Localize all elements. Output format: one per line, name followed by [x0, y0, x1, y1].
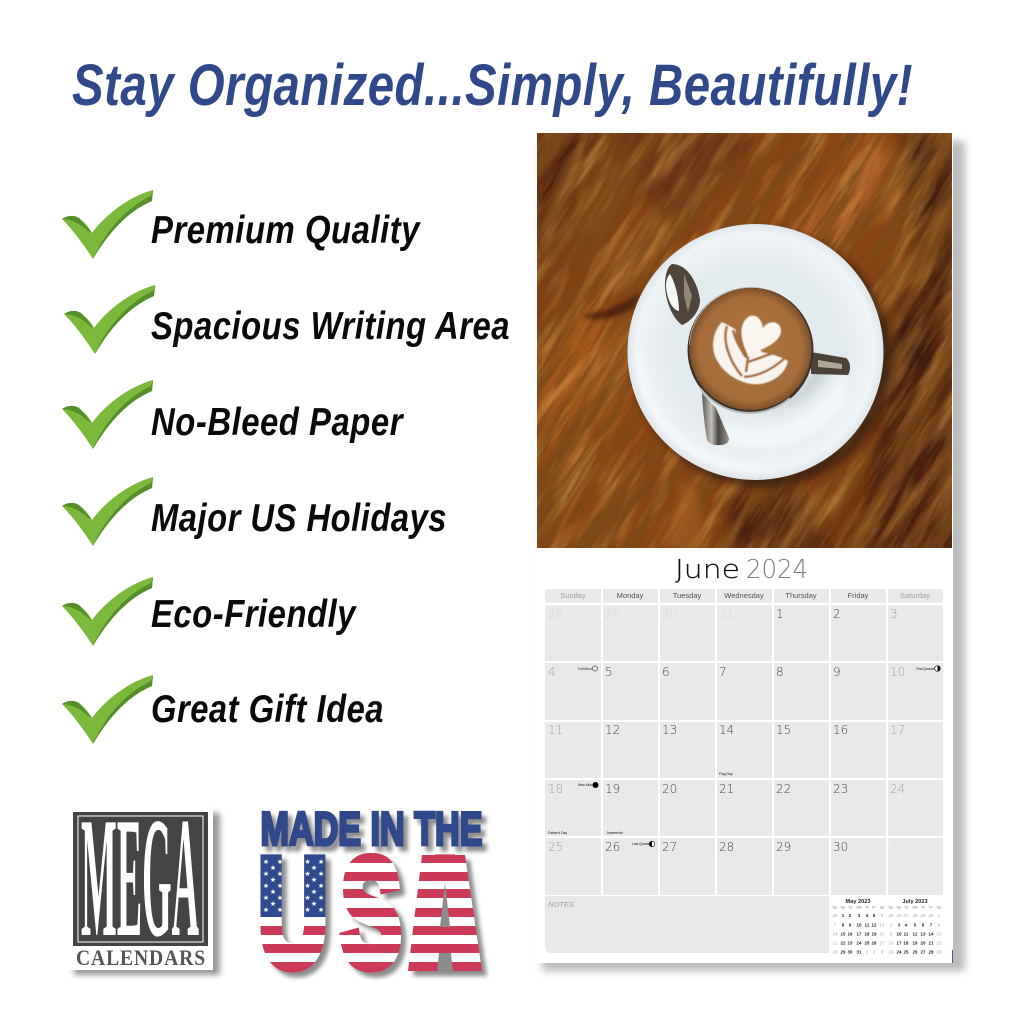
flag lettering: USA: ★: [263, 906, 269, 914]
flag lettering: USA: ★: [318, 858, 324, 866]
mini calendar: May 2023: 7: [834, 922, 837, 928]
mini calendar: May 2023: 5: [873, 913, 876, 918]
mini calendar: May 2023: 1: [842, 913, 845, 918]
day numbers: 22: [776, 782, 791, 796]
flag lettering: USA: ★: [298, 876, 304, 884]
flag lettering: USA: ★: [277, 882, 283, 890]
mini calendar: May 2023: Tu: [848, 906, 852, 910]
flag lettering: USA: ★: [263, 882, 269, 890]
spoon handle: [702, 393, 729, 445]
day numbers: 19: [605, 782, 620, 796]
mini calendar: May 2023: 17: [857, 932, 862, 936]
day numbers: 25: [548, 840, 563, 854]
mini calendar: May 2023: 11: [865, 922, 870, 928]
day numbers: 4: [548, 665, 556, 679]
mini calendar: May 2023: 14: [833, 932, 838, 936]
feature: No-Bleed Paper: No-Bleed Paper: [151, 401, 404, 444]
flag lettering: USA: ★: [263, 870, 269, 878]
flag lettering: USA: ★: [325, 900, 331, 908]
feature: Spacious Writing Area: Spacious Writing Area: [151, 305, 510, 348]
feature: Eco-Friendly: Eco-Friendly: [151, 593, 357, 636]
mini calendar: July 2023: 14: [929, 932, 934, 936]
weekday header row: Thursday: [785, 591, 817, 600]
mini calendar: May 2023: Mo: [841, 906, 845, 910]
feature: Premium Quality: Premium Quality: [151, 209, 421, 252]
flag lettering: USA: ★: [304, 894, 311, 902]
mini calendar: July 2023: 19: [913, 940, 918, 946]
day numbers: 23: [833, 782, 848, 796]
plate: [628, 224, 884, 480]
flag lettering: USA: ★: [291, 906, 297, 914]
feature: Great Gift Idea: Great Gift Idea: [151, 688, 384, 731]
mini calendar: July 2023: 10: [897, 932, 902, 936]
mini calendar: July 2023: 3: [898, 922, 901, 928]
flag lettering: USA: ★: [270, 900, 276, 908]
flag lettering: USA: ★: [291, 894, 297, 902]
flag lettering: USA: ★: [311, 864, 317, 872]
mini calendar: July 2023: 29: [937, 950, 942, 954]
flag lettering: USA: ★: [284, 888, 290, 896]
day numbers: 14: [719, 723, 734, 737]
day numbers: 31: [719, 607, 734, 621]
mini calendar: July 2023: 24: [897, 950, 902, 954]
day numbers: 13: [662, 723, 677, 737]
icon: check mark 1: [62, 190, 153, 259]
holiday and moon-phase notes: New Moon: [578, 783, 594, 787]
weekday header row: Sunday: [560, 591, 586, 600]
mini calendar: May 2023: 24: [857, 940, 862, 946]
day cells: [545, 605, 943, 895]
mini calendar: May 2023: 26: [872, 940, 877, 946]
mini calendar: May 2023: Th: [865, 906, 869, 910]
heading: Made in the: MADE IN THE: [265, 807, 487, 860]
mini calendar: July 2023: 20: [921, 940, 926, 946]
mini calendar: July 2023: 27: [904, 913, 909, 918]
flag lettering: USA: [260, 853, 490, 980]
mini calendar: July 2023: 27: [921, 950, 926, 954]
day numbers: [548, 607, 905, 854]
day numbers: 8: [776, 665, 784, 679]
day numbers: 30: [662, 607, 677, 621]
mini calendar: July 2023: 16: [889, 940, 894, 946]
flag lettering: USA: ★: [298, 900, 304, 908]
flag lettering: USA: ★: [298, 888, 304, 896]
flag lettering: USA: ★: [304, 858, 311, 866]
feature: Major US Holidays: Major US Holidays: [151, 497, 447, 540]
holiday and moon-phase notes: [548, 666, 940, 847]
mini calendar: July 2023: 28: [929, 950, 934, 954]
mini calendar: May 2023: 18: [865, 932, 870, 936]
mini calendar: July 2023: 30: [929, 913, 934, 918]
holiday and moon-phase notes: Last Quarter: [632, 842, 652, 846]
mini calendar: July 2023: Sa: [937, 906, 941, 910]
flag lettering: USA: ★: [325, 876, 331, 884]
day numbers: 29: [605, 607, 620, 621]
flag lettering: USA: ★: [311, 888, 317, 896]
mini calendar: May 2023: 29: [841, 950, 846, 954]
flag lettering: USA: S: [346, 833, 406, 1003]
mini calendar: May 2023: 30: [833, 913, 838, 918]
mini calendar: July 2023: 15: [937, 932, 942, 936]
mini calendar: May 2023: 1: [866, 950, 869, 954]
flag lettering: USA: ★: [332, 858, 338, 866]
calendar grid: [545, 589, 943, 895]
mini calendar: May 2023: 15: [841, 932, 846, 936]
flag lettering: USA: ★: [277, 906, 283, 914]
day numbers: 6: [662, 665, 670, 679]
mini calendar: July 2023: 22: [937, 940, 942, 946]
flag lettering: USA: ★: [270, 876, 276, 884]
day numbers: 1: [776, 607, 784, 621]
month heading: 2024: [746, 555, 808, 585]
calendar page: [537, 133, 970, 976]
mini calendar: May 2023: 21: [833, 940, 838, 946]
mini calendar: July 2023: [889, 899, 942, 954]
mini calendar: May 2023: 2: [873, 950, 876, 954]
mini calendar: May 2023: 23: [848, 940, 853, 946]
icon: check mark 3: [62, 380, 153, 449]
day numbers: 28: [548, 607, 563, 621]
mini calendar: May 2023: 3: [881, 950, 884, 954]
mini calendar: July 2023: 13: [921, 932, 926, 936]
mini calendar: July 2023: 21: [929, 940, 934, 946]
mini calendar: May 2023: 2: [849, 913, 852, 918]
day numbers: 5: [605, 665, 613, 679]
day numbers: 3: [890, 607, 898, 621]
holiday and moon-phase notes: Flag Day: [719, 772, 733, 776]
notes box: NOTES: [548, 900, 574, 909]
mini calendar: May 2023: Fr: [872, 906, 876, 910]
flag lettering: USA: ★: [277, 870, 283, 878]
month heading: June: [675, 555, 740, 585]
day numbers: 30: [833, 840, 848, 854]
mini calendar: May 2023: We: [856, 906, 862, 910]
flag lettering: USA: ★: [304, 870, 311, 878]
wood grain: [537, 133, 952, 548]
feature list: [62, 190, 510, 744]
mini calendar: July 2023: 8: [938, 922, 941, 928]
text: MEGA: [81, 783, 199, 973]
mini calendar: May 2023: 3: [858, 913, 861, 918]
flag lettering: USA: ★: [270, 888, 276, 896]
icon: check mark 2: [64, 285, 155, 354]
day numbers: 7: [719, 665, 727, 679]
flag lettering: USA: ★: [318, 870, 324, 878]
flag lettering: USA: ★: [318, 894, 324, 902]
flag lettering: USA: ★: [311, 876, 317, 884]
day numbers: 9: [833, 665, 841, 679]
day numbers: 17: [890, 723, 905, 737]
flag lettering: USA: U: [264, 833, 332, 1003]
icon: check mark 4: [62, 477, 153, 546]
mini calendar: July 2023: Mo: [897, 906, 901, 910]
day numbers: 29: [776, 840, 791, 854]
weekday header row: Wednesday: [724, 591, 764, 600]
weekday header row: Saturday: [900, 591, 930, 600]
flag lettering: USA: ★: [291, 870, 297, 878]
day numbers: 28: [719, 840, 734, 854]
day numbers: 10: [890, 665, 905, 679]
mini calendar: May 2023: 30: [848, 950, 853, 954]
flag lettering: USA: A: [418, 833, 482, 1003]
flag lettering: USA: ★: [284, 876, 290, 884]
mini calendar: May 2023: 9: [849, 922, 852, 928]
mini calendar: May 2023: 19: [872, 932, 877, 936]
mini calendar: May 2023: 8: [842, 922, 845, 928]
flag lettering: USA: ★: [304, 906, 311, 914]
flag lettering: USA: ★: [291, 858, 297, 866]
mini calendar: July 2023: 25: [889, 913, 894, 918]
weekday header row: [545, 589, 943, 603]
flag lettering: USA: ★: [311, 900, 317, 908]
wood tones: [537, 133, 952, 548]
mini calendar: May 2023: 10: [857, 922, 862, 928]
day numbers: 1: [890, 840, 898, 854]
mini calendar: July 2023: Fr: [929, 906, 933, 910]
mini calendar: July 2023: July 2023: [902, 899, 928, 905]
flag lettering: USA: ★: [277, 858, 283, 866]
icon: check mark 5: [62, 577, 153, 646]
plate shadow: [634, 230, 892, 488]
day numbers: 11: [548, 723, 563, 737]
mini calendar: May 2023: 16: [848, 932, 853, 936]
photo: latte on wooden table: [537, 133, 952, 548]
day numbers: 2: [833, 607, 841, 621]
mini calendar: May 2023: 28: [833, 950, 838, 954]
flag lettering: USA: ★: [263, 858, 269, 866]
logo: Mega Calendars: CALENDARS: [76, 945, 206, 970]
mini calendar: July 2023: 26: [897, 913, 902, 918]
flag lettering: USA: ★: [284, 864, 290, 872]
coffee crema: [690, 288, 812, 410]
flag lettering: USA: ★: [318, 906, 324, 914]
mini calendar: July 2023: 6: [922, 922, 925, 928]
day numbers: 18: [548, 782, 563, 796]
logo: Mega Calendars: [68, 783, 220, 975]
mini calendar: May 2023: 4: [866, 913, 869, 918]
holiday and moon-phase notes: Full Moon: [578, 667, 593, 671]
holiday and moon-phase notes: Father's Day: [548, 831, 567, 835]
mini calendar: May 2023: 31: [857, 950, 862, 954]
mini calendar: July 2023: 18: [904, 940, 909, 946]
flag lettering: USA: ★: [304, 882, 311, 890]
weekday header row: Monday: [617, 591, 644, 600]
day numbers: 16: [833, 723, 848, 737]
latte art: [713, 316, 788, 384]
cup handle: [811, 352, 850, 375]
day numbers: 21: [719, 782, 734, 796]
day numbers: 15: [776, 723, 791, 737]
mini calendar: May 2023: 27: [880, 940, 885, 946]
flag lettering: USA: ★: [318, 882, 324, 890]
flag lettering: USA: ★: [277, 894, 283, 902]
flag lettering: USA: ★: [332, 906, 338, 914]
mini calendar: July 2023: 26: [913, 950, 918, 954]
mini calendar: July 2023: 5: [914, 922, 917, 928]
mini calendar: July 2023: Su: [889, 906, 893, 910]
flag lettering: USA: ★: [263, 894, 269, 902]
flag lettering: USA: ★: [298, 864, 304, 872]
heading: Made in the: [260, 802, 487, 860]
mini calendar: July 2023: 25: [904, 950, 909, 954]
mini calendar: May 2023: 25: [865, 940, 870, 946]
flag lettering: USA: ★: [270, 864, 276, 872]
notes box: [545, 896, 829, 953]
heading: Made in the: MADE IN THE: [260, 802, 482, 855]
day numbers: 27: [662, 840, 677, 854]
logo: Made in the USA: [260, 810, 490, 980]
mini calendar: May 2023: 13: [880, 922, 885, 928]
mini calendar: May 2023: 6: [881, 913, 884, 918]
month heading: [675, 555, 808, 585]
mini calendar: July 2023: 7: [930, 922, 933, 928]
mini calendar: May 2023: 12: [872, 922, 877, 928]
flag lettering: USA: ★: [325, 888, 331, 896]
flag lettering: USA: ★: [284, 900, 290, 908]
mini calendar: July 2023: 11: [904, 932, 909, 936]
mini calendar: July 2023: 1: [938, 913, 941, 918]
mini calendar: May 2023: 22: [841, 940, 846, 946]
flag lettering: USA: ★: [332, 894, 338, 902]
mini calendar: May 2023: Sa: [880, 906, 884, 910]
icon: check mark 6: [62, 675, 153, 744]
mini calendar: May 2023: 20: [880, 932, 885, 936]
mini calendar: July 2023: 29: [921, 913, 926, 918]
mini calendar: July 2023: 2: [890, 922, 893, 928]
holiday and moon-phase notes: Juneteenth: [606, 831, 623, 835]
flag lettering: USA: ★: [291, 882, 297, 890]
mini calendar: May 2023: [833, 899, 885, 954]
cup rim: [688, 287, 814, 413]
day numbers: 12: [605, 723, 620, 737]
mini calendar: July 2023: Tu: [904, 906, 908, 910]
day numbers: 24: [890, 782, 905, 796]
day numbers: 20: [662, 782, 677, 796]
mini calendar: July 2023: We: [912, 906, 918, 910]
mini calendar: July 2023: 9: [890, 932, 893, 936]
holiday and moon-phase notes: First Quarter: [916, 667, 936, 671]
weekday header row: Friday: [848, 591, 869, 600]
mini calendar: July 2023: 23: [889, 950, 894, 954]
mini calendar: July 2023: 12: [913, 932, 918, 936]
flag lettering: USA: ★: [332, 870, 338, 878]
flag lettering: USA: ★: [325, 864, 331, 872]
flag lettering: USA: ★: [332, 882, 338, 890]
mini calendar: July 2023: 4: [905, 922, 908, 928]
weekday header row: Tuesday: [673, 591, 701, 600]
spoon bowl: [665, 264, 700, 325]
mini calendar: July 2023: 17: [897, 940, 902, 946]
mini calendar: July 2023: Th: [921, 906, 925, 910]
mini calendar: July 2023: 28: [913, 913, 918, 918]
day numbers: 26: [605, 840, 620, 854]
mini calendar: May 2023: Su: [833, 906, 837, 910]
mini calendar: May 2023: May 2023: [846, 899, 870, 905]
